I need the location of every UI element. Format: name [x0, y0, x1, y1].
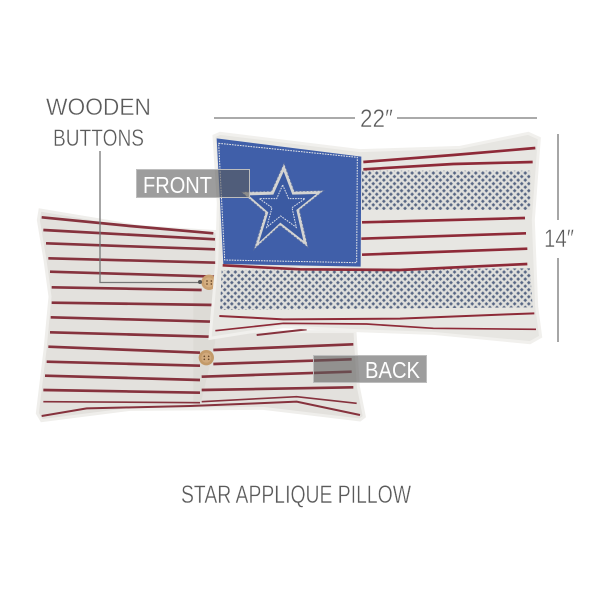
dimension: width 22 inches: 22″	[360, 105, 393, 133]
callout: wooden buttons	[46, 94, 202, 284]
front pillow stripes	[215, 148, 536, 331]
label: front: FRONT	[143, 172, 212, 198]
dimension: height 14 inches: 14″	[544, 225, 574, 253]
canton stitching	[219, 143, 357, 263]
title: STAR APPLIQUE PILLOW	[181, 481, 411, 509]
callout: wooden buttons: WOODEN	[46, 94, 151, 121]
label: back: BACK	[365, 357, 421, 383]
callout: wooden buttons: BUTTONS	[53, 125, 144, 152]
dotted band upper	[362, 171, 530, 210]
front pillow	[210, 133, 541, 343]
dotted band lower	[220, 268, 533, 310]
blue flag canton	[217, 138, 361, 267]
back pillow stripes	[42, 217, 360, 416]
label: front	[136, 170, 250, 198]
wooden button top	[201, 275, 217, 290]
star applique	[241, 163, 324, 249]
back pillow	[37, 210, 364, 421]
label: back	[314, 356, 426, 383]
wooden button bottom	[199, 350, 214, 365]
